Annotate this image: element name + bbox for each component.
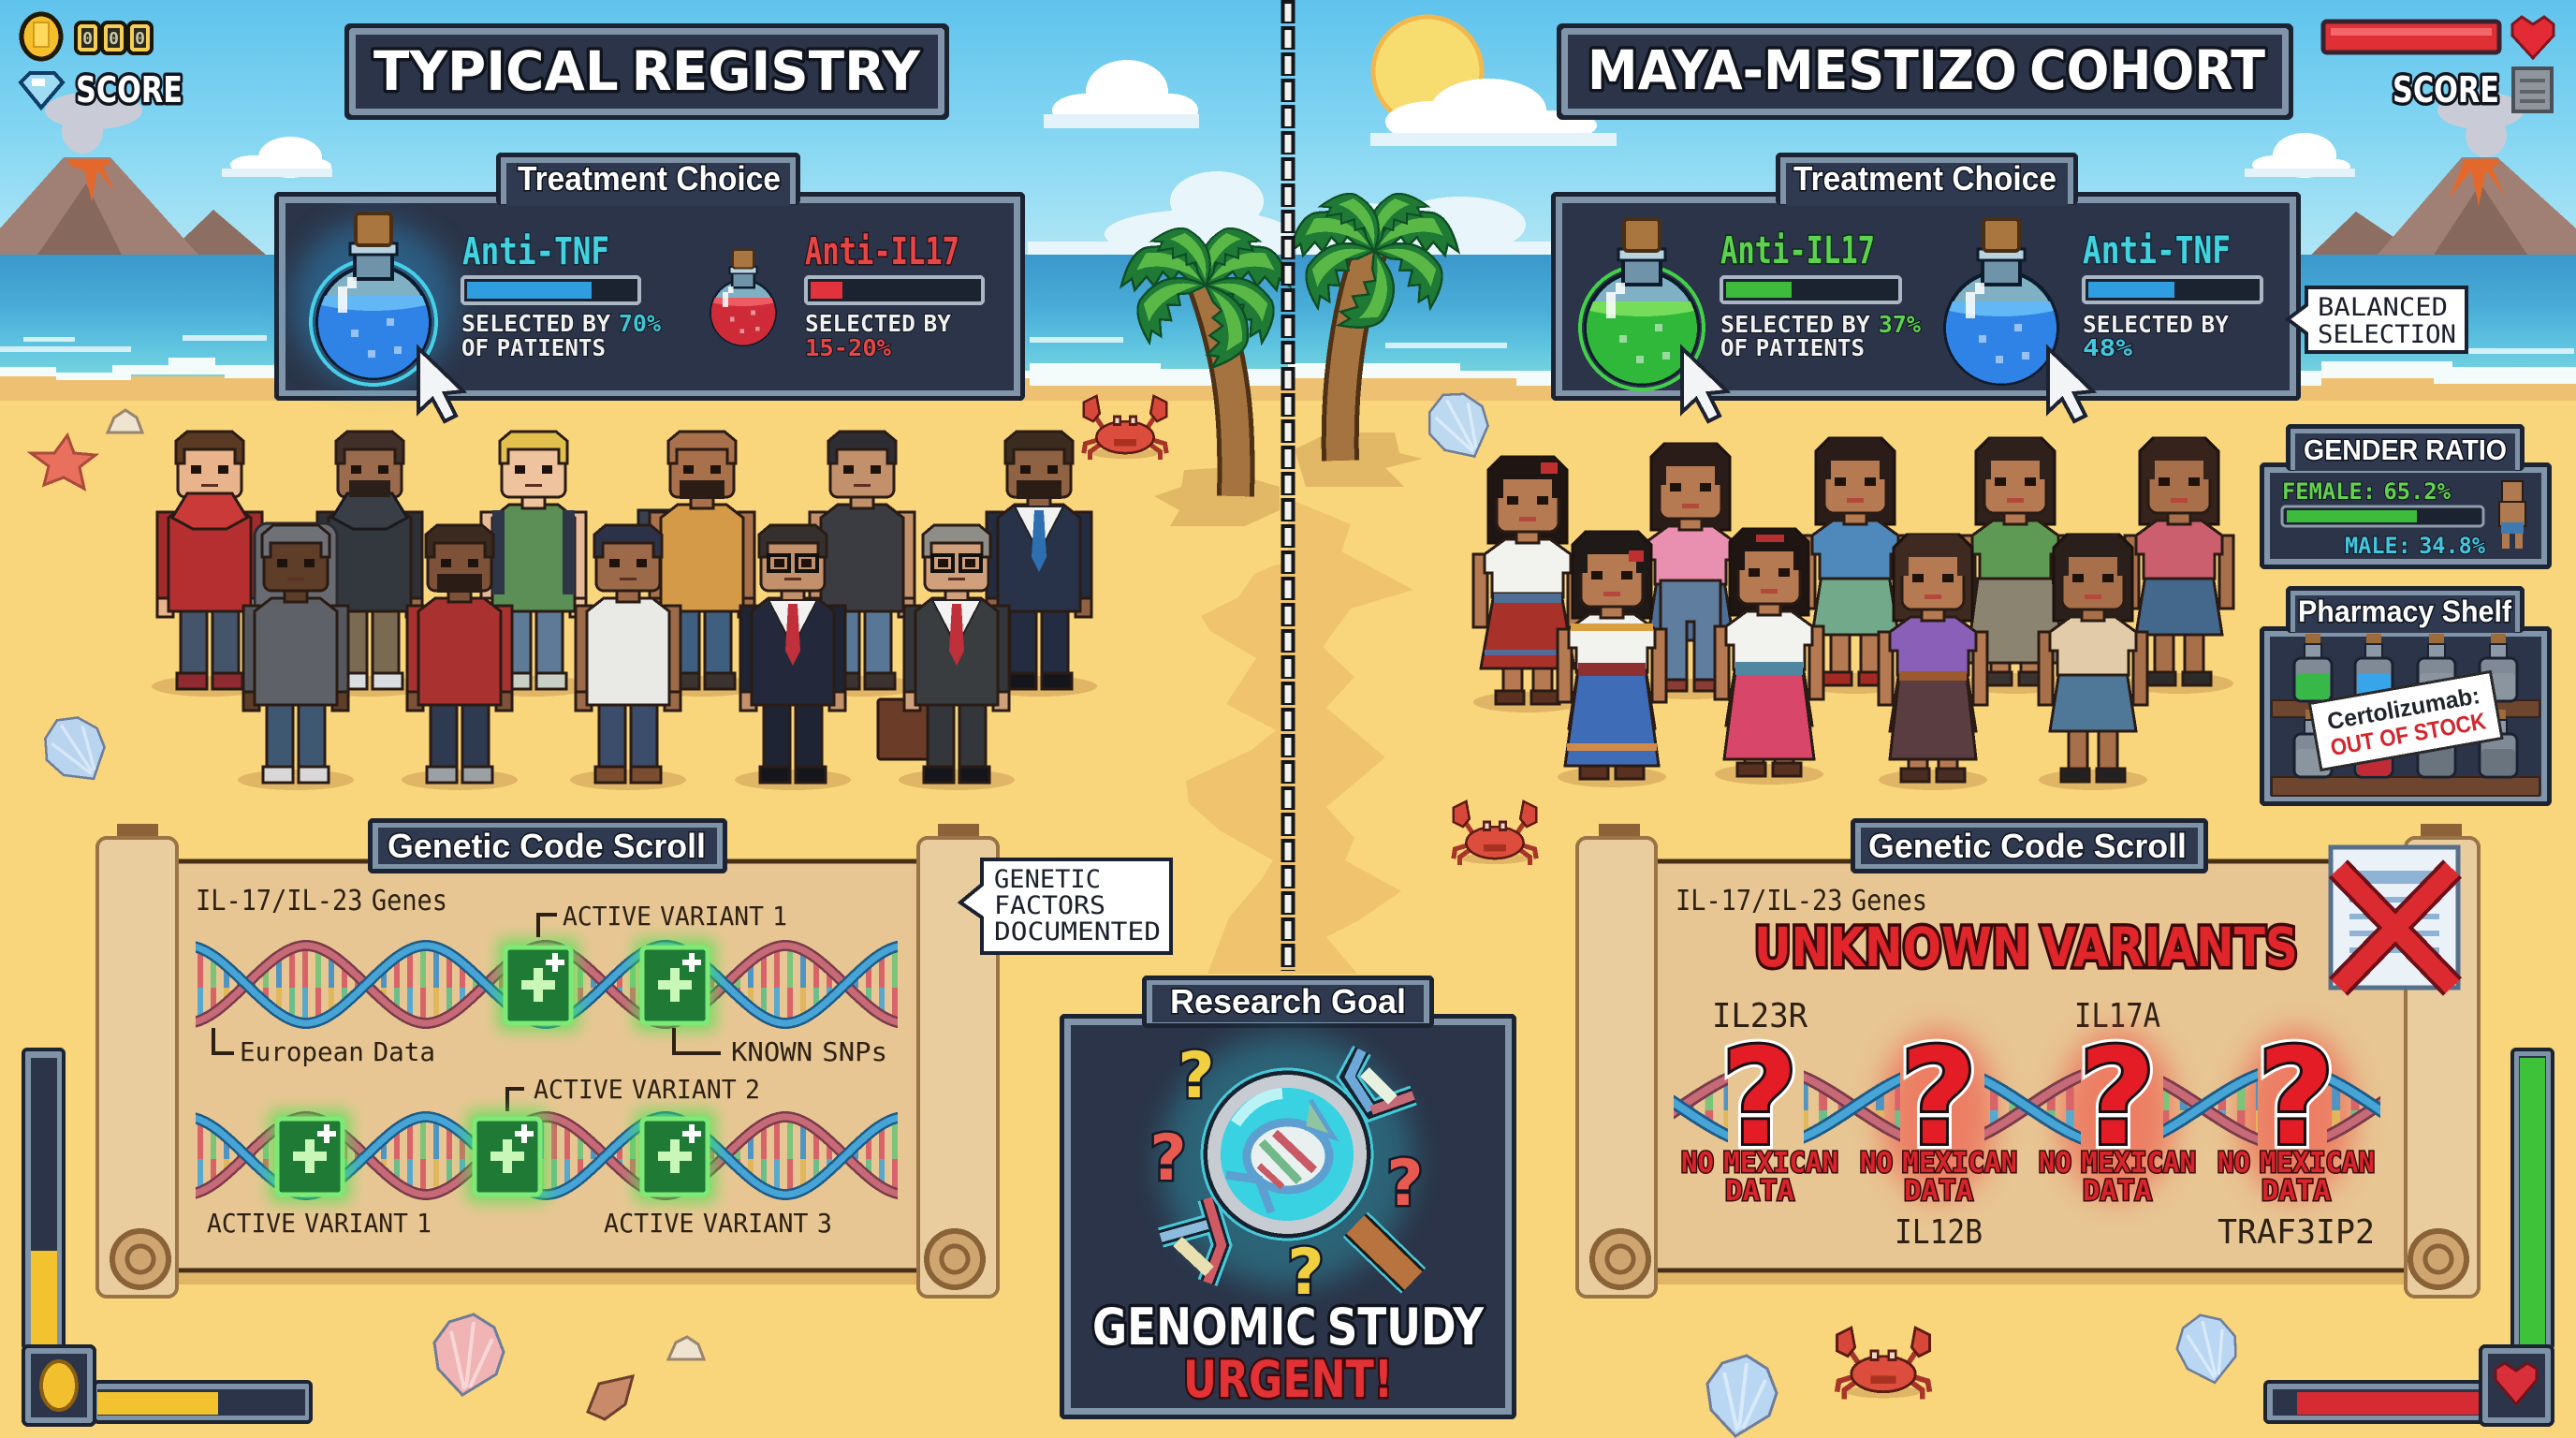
- red warning glows: [1881, 1030, 2354, 1198]
- palm tree right: [1290, 182, 1458, 461]
- woman: white blouse blue skirt: [1558, 532, 1666, 787]
- anti-il17 bar: [806, 277, 983, 303]
- tab: genetic code scroll right: [1851, 818, 2208, 873]
- unknown gene IL12B: ?: [1900, 1020, 1977, 1175]
- unknown gene IL23R: NO MEXICAN: [1681, 1147, 1838, 1180]
- cloud near sun: [1370, 79, 1617, 146]
- unknown gene TRAF3IP2: [2217, 1020, 2375, 1208]
- icon: starfish: [31, 435, 95, 489]
- known snp marker b: [634, 938, 716, 1032]
- tab: gender ratio: GENDER RATIO: [2304, 433, 2507, 466]
- dna unknown strand: [1674, 1068, 2380, 1146]
- man: grey hoodie: [238, 523, 354, 790]
- tab: genetic code scroll: [368, 818, 727, 873]
- title: maya-mestizo cohort: [1557, 23, 2293, 120]
- title: maya-mestizo cohort: MAYA-MESTIZO COHORT: [1588, 38, 2265, 102]
- man: red tee: [402, 525, 518, 790]
- question marks: ?: [1178, 1039, 1215, 1113]
- male label: MALE: 34.8%: [2345, 533, 2486, 559]
- icon: cursor left: [418, 348, 463, 421]
- anti-il17 label green: Anti-IL17: [1720, 229, 1875, 272]
- icon: crab bottom: [1837, 1328, 1929, 1399]
- icon: male figure: [2499, 481, 2525, 549]
- crowd: maya-mestizo women: [1473, 438, 2233, 790]
- scroll rollers: [97, 824, 998, 1297]
- anti-tnf label: Anti-TNF: [462, 230, 609, 273]
- icon: blue shell left: [32, 704, 121, 794]
- icon: crab top left: [1084, 396, 1166, 460]
- tab: genetic code scroll: Genetic Code Scroll: [388, 827, 706, 865]
- label: active variant 3: ACTIVE VARIANT 3: [604, 1208, 832, 1239]
- question marks: ?: [1149, 1122, 1187, 1196]
- wet sand path: [1186, 502, 1413, 974]
- unknown gene IL17A: [2039, 1020, 2196, 1208]
- title: typical registry: [344, 23, 949, 120]
- unknown gene IL23R: [1681, 1020, 1838, 1208]
- icon: crossed out document: [2331, 847, 2458, 988]
- question marks: ?: [1287, 1236, 1325, 1310]
- unknown gene TRAF3IP2: DATA: [2261, 1175, 2331, 1208]
- female label: FEMALE: 65.2%: [2282, 478, 2452, 505]
- panel: genetic code scroll right: [1577, 818, 2576, 1297]
- man: bald orange tee: [638, 432, 760, 697]
- anti-tnf label right: Anti-TNF: [2083, 229, 2231, 272]
- sea wave highlights: [0, 335, 2574, 354]
- sticker: out of stock: [2309, 672, 2502, 770]
- unknown gene IL17A: ?: [2079, 1020, 2156, 1175]
- label: genes heading right: IL-17/IL-23 Genes: [1676, 885, 1927, 917]
- label: european data: [213, 1028, 435, 1067]
- panel: treatment choice left: [274, 153, 1025, 401]
- panel: gender ratio: [2260, 424, 2552, 569]
- active marker 1: [269, 1109, 351, 1203]
- health bar and heart top right: [2323, 17, 2554, 58]
- anti-tnf bar 48 percent: [2084, 277, 2261, 302]
- label: genes heading: IL-17/IL-23 Genes: [196, 885, 447, 917]
- icon: blue shell upper: [1415, 380, 1503, 470]
- callout: balanced selection: [2288, 287, 2466, 352]
- woman: white blouse pink skirt: [1715, 529, 1823, 785]
- coin and digit counter: 0: [109, 29, 119, 49]
- woman: blue top green skirt: [1801, 438, 1910, 694]
- man: black tee: [804, 432, 920, 697]
- unknown gene TRAF3IP2: ?: [2258, 1020, 2334, 1175]
- anti-tnf selected text right: [2083, 311, 2229, 361]
- man: grey suit with briefcase: [878, 525, 1015, 790]
- woman: beige top blue skirt: [2039, 535, 2147, 790]
- palm shadow right: [1295, 433, 1423, 487]
- icon: blue shell bottom right: [2169, 1306, 2247, 1391]
- gauge: green and red corner bars: [2265, 1049, 2553, 1425]
- anti-tnf selected text: [461, 310, 661, 361]
- panel: genetic code scroll left: [97, 818, 998, 1297]
- anti-il17 label: Anti-IL17: [805, 230, 959, 273]
- surf foam: [0, 358, 2576, 386]
- crowd: typical registry men: [152, 432, 1097, 790]
- man: red hoodie: [152, 432, 268, 697]
- dna strand 2: [186, 1109, 907, 1203]
- center divider line: [1281, 0, 1295, 971]
- heading: unknown variants: UNKNOWN VARIANTS: [1754, 916, 2298, 979]
- sun: [1373, 17, 1482, 125]
- dna fragment bottom left: [1161, 1198, 1222, 1283]
- callout: balanced selection: BALANCED: [2318, 293, 2448, 322]
- sticker: out of stock: OUT OF STOCK: [2329, 708, 2488, 761]
- gene labels: TRAF3IP2: [2217, 1213, 2375, 1252]
- bottles: [2294, 634, 2517, 777]
- icon: pebble shell: [668, 1337, 704, 1359]
- callout: balanced selection: SELECTION: [2318, 320, 2456, 349]
- score right with block: SCORE: [2393, 69, 2499, 110]
- shelves: [2272, 700, 2539, 796]
- anti-il17 selected text green: SELECTED BY 37%: [1720, 311, 1921, 338]
- man: black hoodie: [312, 432, 428, 697]
- dna fragment top right: [1348, 1050, 1413, 1110]
- gauge: yellow corner bars: [23, 1049, 311, 1425]
- anti-il17 selected text green: OF PATIENTS: [1720, 334, 1865, 361]
- panel: research goal: [1060, 976, 1516, 1419]
- man: dark suit red tie: [735, 525, 851, 790]
- panel: treatment choice right: [1551, 153, 2301, 401]
- tab: treatment choice right: [1776, 153, 2078, 206]
- callout: genetic factors documented: [960, 859, 1171, 953]
- anti-tnf selected text right: 48%: [2083, 334, 2132, 361]
- text: urgent: URGENT!: [1183, 1350, 1393, 1409]
- unknown gene TRAF3IP2: NO MEXICAN: [2217, 1147, 2375, 1180]
- woman: pink blouse jeans: [1636, 444, 1745, 699]
- tab: gender ratio: [2286, 424, 2525, 471]
- cloud behind right palm: [1296, 197, 1551, 256]
- anti-il17 selected text: [805, 310, 951, 361]
- icon: red potion: [710, 250, 777, 346]
- active marker 3: [634, 1109, 716, 1203]
- anti-il17 selected text: 15-20%: [805, 334, 891, 361]
- unknown gene IL12B: NO MEXICAN: [1860, 1147, 2017, 1180]
- sea: [0, 255, 2576, 376]
- coin and digit counter: 0: [82, 29, 93, 49]
- small cloud left: [222, 137, 332, 178]
- active marker 2: [466, 1109, 549, 1203]
- icon: green potion: [1580, 219, 1704, 389]
- cloud top left: [1044, 60, 1199, 128]
- woman: rose top denim skirt: [2125, 438, 2233, 694]
- cloud behind left palm: [1028, 171, 1292, 258]
- woman: white blouse red skirt: [1473, 457, 1582, 712]
- label: active variant 1 top: ACTIVE VARIANT 1: [563, 901, 787, 932]
- ratio bar: [2282, 506, 2483, 526]
- gene labels: IL17A: [2074, 997, 2160, 1035]
- scroll rollers right: [1577, 824, 2479, 1297]
- anti-tnf selected text: OF PATIENTS: [461, 334, 606, 361]
- tab: pharmacy shelf: [2286, 586, 2525, 633]
- magnifier lens: [1202, 1069, 1372, 1240]
- unknown gene IL17A: DATA: [2083, 1175, 2152, 1208]
- text: genomic study: GENOMIC STUDY: [1092, 1298, 1485, 1357]
- scroll paper: [168, 861, 927, 1270]
- callout: genetic factors documented: DOCUMENTED: [994, 917, 1161, 946]
- icon: blue potion right: [1943, 219, 2059, 386]
- woman: purple blouse brown skirt: [1879, 535, 1987, 790]
- sand: [0, 401, 2576, 1438]
- unknown gene TRAF3IP2: ?: [2258, 1020, 2334, 1175]
- volcano left: [0, 92, 266, 255]
- question marks: [1149, 1039, 1424, 1310]
- icon: cursor blue: [2048, 348, 2093, 421]
- label: european data: European Data: [240, 1036, 435, 1067]
- icon: small shell: [108, 410, 142, 433]
- gene labels: [1712, 997, 2375, 1252]
- icon: crab center: [1454, 801, 1536, 865]
- coin and digit counter: 0: [135, 29, 145, 49]
- palm tree left: [1121, 216, 1290, 496]
- anti-il17 selected text green: [1720, 311, 1921, 361]
- scroll paper right: [1647, 861, 2415, 1270]
- coin and digit counter: [22, 14, 152, 59]
- unknown gene IL12B: DATA: [1904, 1175, 1973, 1208]
- gene labels: IL23R: [1712, 997, 1808, 1035]
- woman: green top grey skirt: [1961, 438, 2070, 694]
- man: suit blue tie: [981, 432, 1097, 697]
- scene background: sky: [0, 0, 2576, 257]
- volcano right: [2311, 92, 2576, 255]
- icon: magnifier over dna: [1161, 1034, 1413, 1287]
- label: active variant 2: ACTIVE VARIANT 2: [534, 1074, 760, 1105]
- icon: brown shell: [588, 1376, 633, 1419]
- unknown gene IL17A: ?: [2079, 1020, 2156, 1175]
- label: active variant 1 bottom: ACTIVE VARIANT 1: [207, 1208, 432, 1239]
- anti-tnf selected text: SELECTED BY 70%: [461, 310, 661, 337]
- diamond and score left: SCORE: [76, 69, 183, 110]
- magnifier handle: [1355, 1225, 1413, 1281]
- label: known snps: KNOWN SNPs: [731, 1036, 887, 1067]
- tab: treatment choice: Treatment Choice: [518, 159, 781, 198]
- anti-tnf selected text right: SELECTED BY: [2083, 311, 2229, 338]
- man: green tee blonde: [476, 432, 592, 697]
- palm shadow left: [1154, 468, 1280, 526]
- known snp marker a: [497, 938, 579, 1032]
- tab: treatment choice right: Treatment Choice: [1793, 159, 2056, 198]
- title: typical registry: TYPICAL REGISTRY: [373, 39, 921, 103]
- callout: genetic factors documented: FACTORS: [994, 891, 1105, 920]
- icon: blue shell bottom: [1707, 1356, 1777, 1436]
- diamond and score left: [21, 69, 183, 110]
- icon: cursor green: [1682, 348, 1727, 421]
- unknown gene IL17A: NO MEXICAN: [2039, 1147, 2196, 1180]
- man: white tee: [570, 525, 686, 790]
- unknown gene IL23R: DATA: [1725, 1175, 1794, 1208]
- tab: pharmacy shelf: Pharmacy Shelf: [2298, 594, 2511, 628]
- sticker: out of stock: Certolizumab:: [2325, 682, 2482, 735]
- unknown gene IL12B: [1860, 1020, 2017, 1208]
- tab: treatment choice: [496, 153, 800, 206]
- unknown gene IL23R: ?: [1721, 1020, 1798, 1175]
- tab: research goal: Research Goal: [1170, 982, 1406, 1020]
- callout: genetic factors documented: GENETIC: [994, 865, 1101, 894]
- anti-tnf bar 70 percent: [462, 277, 639, 303]
- dna strand 1: [186, 938, 907, 1032]
- tab: research goal: [1142, 976, 1434, 1028]
- question marks: ?: [1386, 1147, 1424, 1221]
- anti-il17 bar 37 percent: [1721, 277, 1900, 302]
- small cloud right: [2245, 133, 2355, 178]
- icon: blue potion: [291, 213, 456, 386]
- anti-il17 selected text: SELECTED BY: [805, 310, 951, 337]
- label: known snps: [674, 1028, 887, 1067]
- tab: genetic code scroll right: Genetic Code Scroll: [1868, 827, 2187, 865]
- gene labels: IL12B: [1895, 1213, 1983, 1252]
- wet sand band: [0, 376, 2576, 404]
- unknown gene IL23R: ?: [1721, 1020, 1798, 1175]
- icon: pink shell: [434, 1314, 504, 1395]
- unknown gene IL12B: ?: [1900, 1020, 1977, 1175]
- panel: pharmacy shelf: [2260, 586, 2552, 806]
